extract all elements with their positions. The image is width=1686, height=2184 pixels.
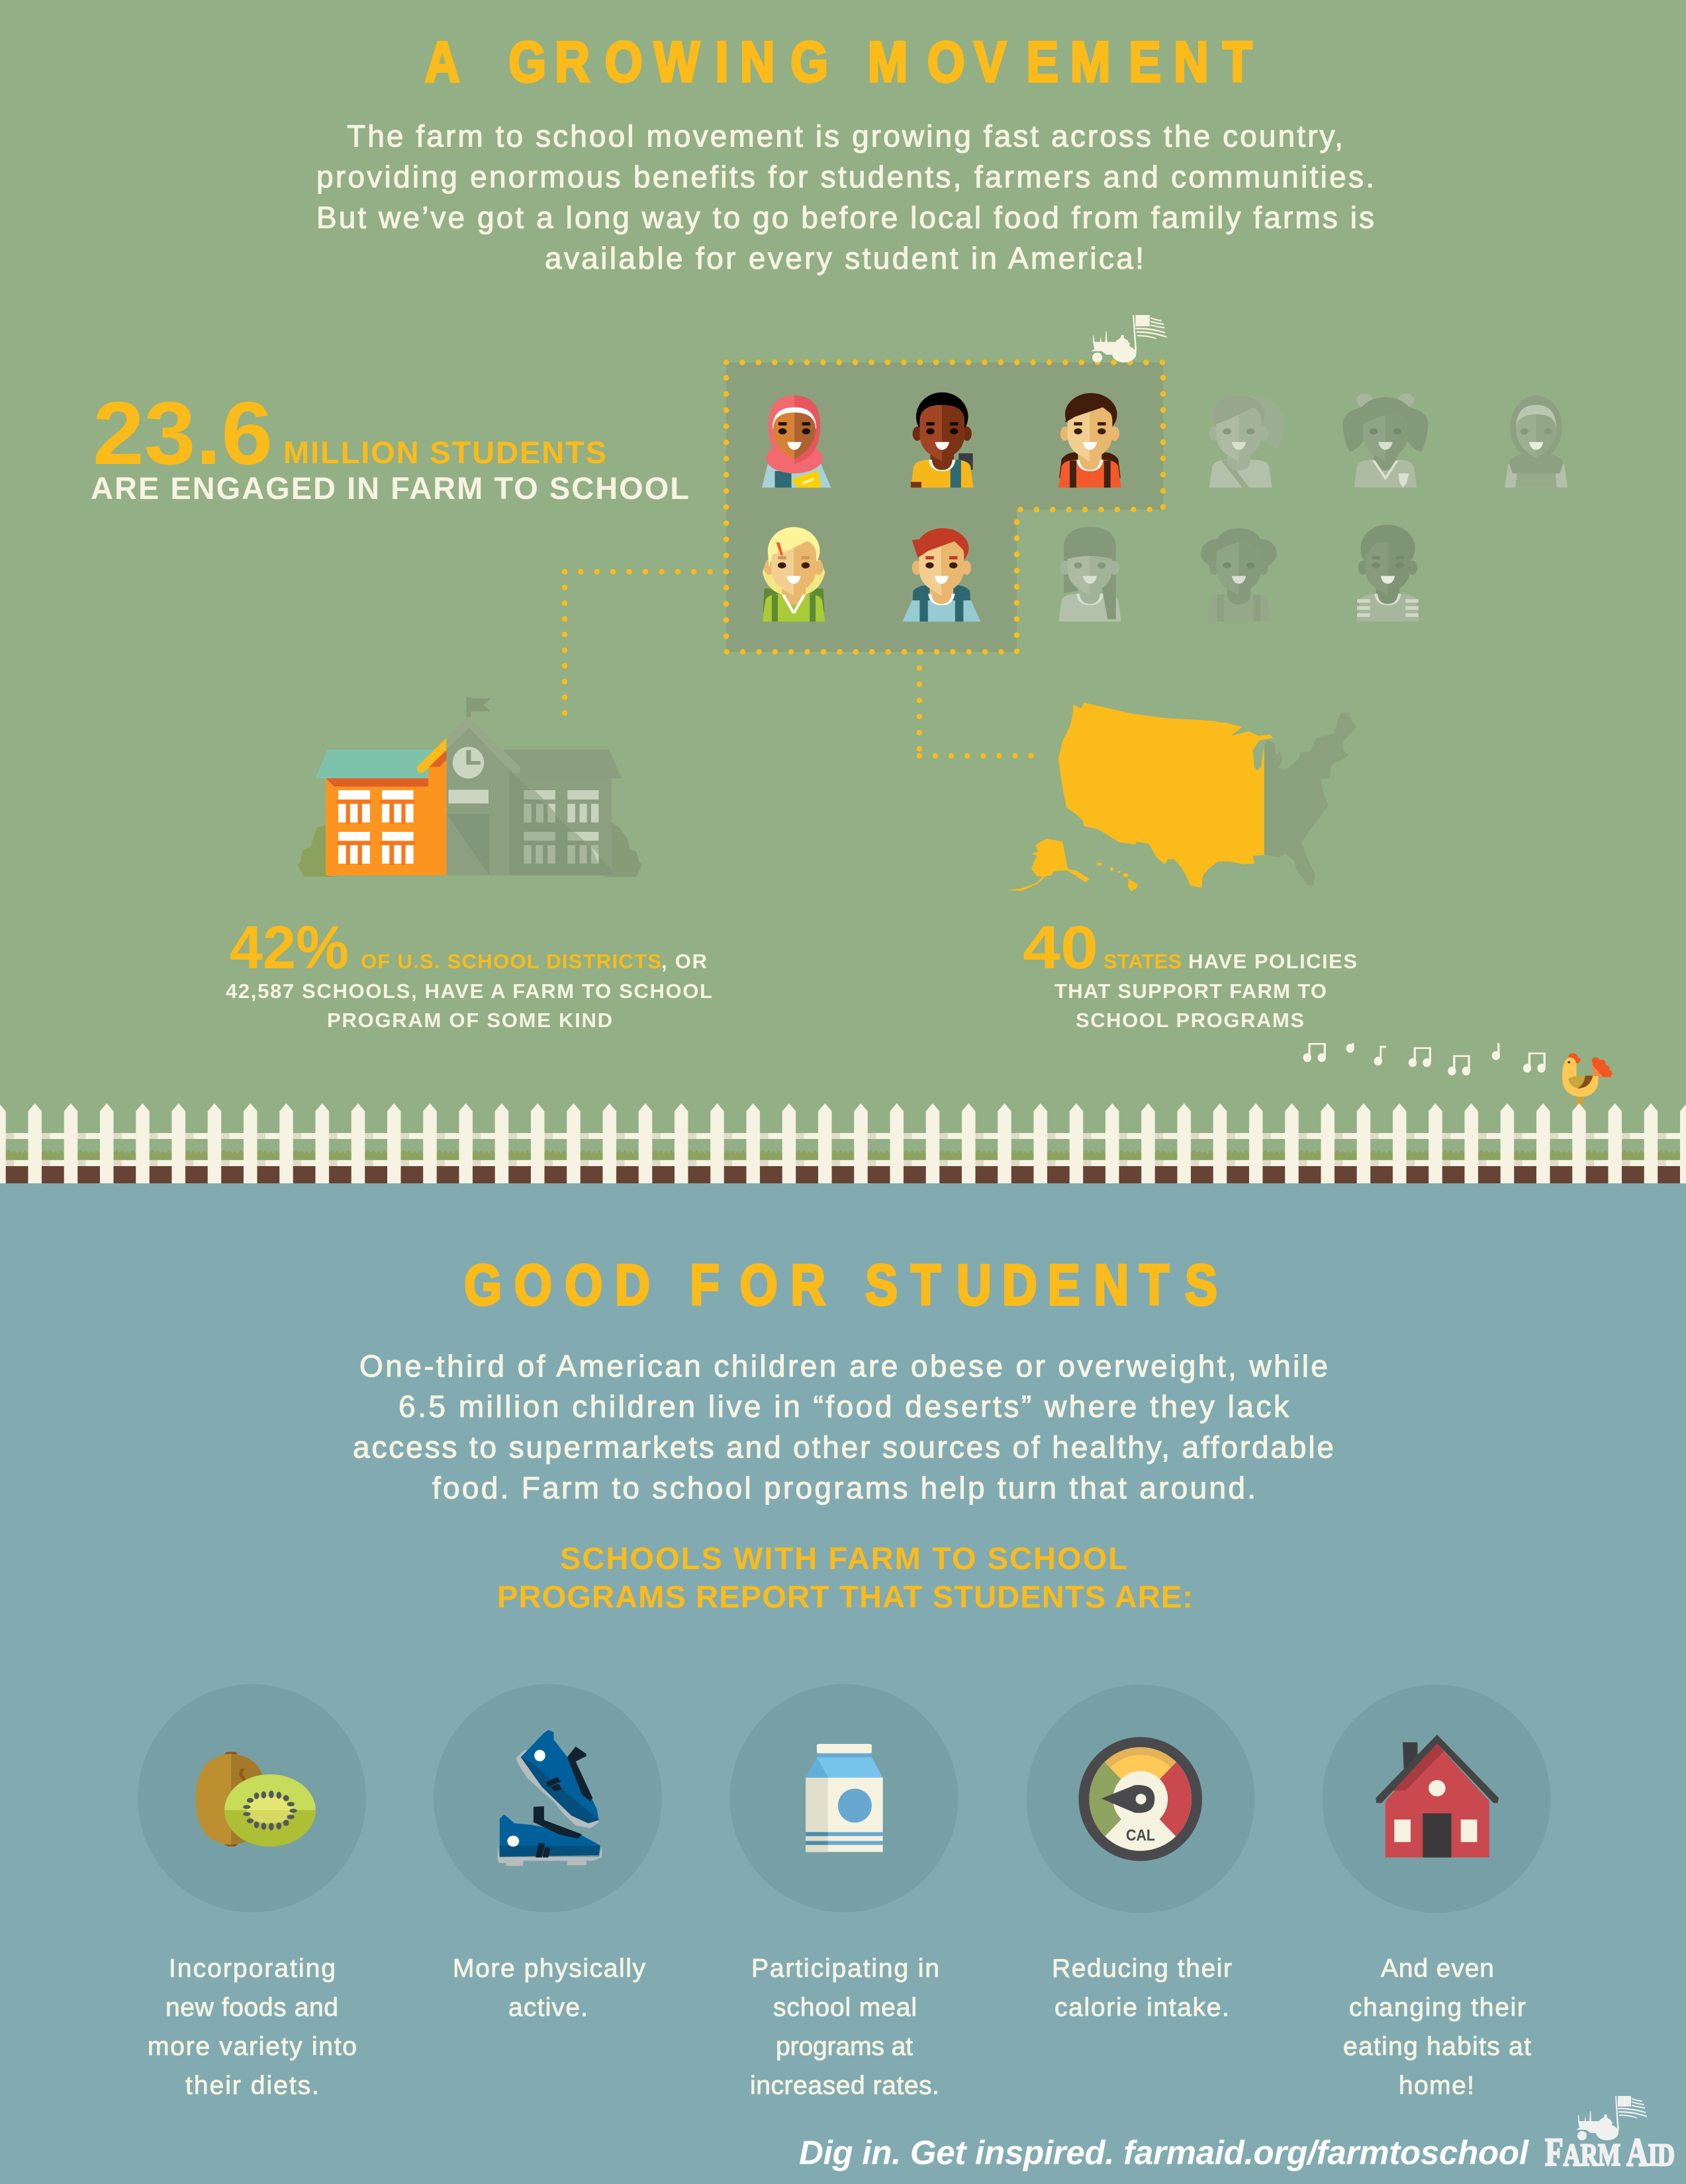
student: faded girl in hijab xyxy=(1505,395,1568,488)
logo wordmark: FARM AID xyxy=(1545,2130,1675,2174)
icon: school building half coloured xyxy=(297,697,642,877)
intro paragraph: The farm to school movement is growing fast across the country, xyxy=(347,119,1343,154)
school left coloured half xyxy=(316,738,446,876)
icon: red house xyxy=(1376,1735,1499,1858)
student portraits grid xyxy=(762,392,1568,621)
icon: running shoes xyxy=(498,1730,602,1866)
rooster xyxy=(1562,1053,1613,1105)
caption: eating habits: home! xyxy=(1399,2071,1474,2100)
icon: calorie gauge: CAL xyxy=(1126,1827,1155,1844)
picket fence with grass and soil xyxy=(0,1103,1686,1183)
caption: school meals: increased rates. xyxy=(750,2071,939,2100)
caption: eating habits xyxy=(1343,1954,1531,2100)
hawaii xyxy=(1098,862,1138,891)
stat: 40 states have policies xyxy=(1023,914,1357,1032)
school right gray half xyxy=(446,697,622,876)
dotted connector to map xyxy=(919,652,1032,756)
caption: new foods: their diets. xyxy=(185,2071,319,2100)
students paragraph: access to supermarkets and other sources of healthy, affordable xyxy=(353,1430,1334,1464)
caption: eating habits: changing their xyxy=(1349,1993,1526,2022)
student: boy with brown hair xyxy=(1058,393,1121,488)
students paragraph xyxy=(353,1349,1334,1505)
stat: 42 percent of school districts: , OR xyxy=(661,950,707,973)
caption: calorie intake xyxy=(1052,1954,1232,2022)
caption: school meals xyxy=(750,1954,939,2100)
student: faded girl with long hair xyxy=(1058,527,1121,621)
icon: milk carton xyxy=(806,1744,883,1852)
icon: kiwi xyxy=(196,1752,316,1846)
intro paragraph xyxy=(316,119,1374,275)
bushes xyxy=(297,823,642,877)
stat: 23.6 million students: 23.6 xyxy=(93,383,273,483)
music notes xyxy=(1303,1043,1546,1075)
bottom shoe xyxy=(498,1806,602,1866)
intro paragraph: providing enormous benefits for students, farmers and communities. xyxy=(316,159,1374,194)
music notes and rooster xyxy=(1303,1043,1613,1105)
stat: 42 percent of school districts: PROGRAM OF SOME KIND xyxy=(327,1009,612,1032)
icon: calorie gauge xyxy=(1079,1737,1202,1861)
highlighted student frame xyxy=(726,363,1163,652)
circle backgrounds for benefit icons xyxy=(138,1684,1550,1913)
stat: 23.6 million students: ARE ENGAGED IN FARM TO SCHOOL xyxy=(91,471,689,506)
student: faded girl with pigtails xyxy=(1342,394,1428,488)
stat: 40 states have policies: 40 xyxy=(1023,914,1098,981)
panel: green section background xyxy=(0,0,1686,1183)
caption: school meals: programs at xyxy=(776,2032,913,2061)
stat: 40 states have policies: HAVE POLICIES xyxy=(1188,950,1357,973)
student: girl in pink hijab xyxy=(762,395,831,488)
top shoe xyxy=(516,1730,599,1829)
stat: 23.6 million students xyxy=(91,383,689,506)
caption: physically active: More physically xyxy=(453,1954,646,1983)
title: good for students: GOOD FOR STUDENTS xyxy=(464,1253,1217,1316)
stat: 42 percent of school districts xyxy=(226,914,712,1032)
icon: tractor and flag xyxy=(1576,2096,1647,2140)
footer call to action: Dig in. Get inspired. farmaid.org/farmtoschool xyxy=(799,2134,1530,2171)
caption: eating habits: eating habits at xyxy=(1343,2032,1531,2061)
stat: 42 percent of school districts: OF U.S. SCHOOL DISTRICTS xyxy=(361,950,661,973)
farm aid logo xyxy=(1545,2096,1675,2174)
stat: 40 states have policies: THAT SUPPORT FARM TO xyxy=(1054,979,1327,1003)
caption: calorie intake: calorie intake. xyxy=(1054,1993,1229,2022)
student: boy with red hair xyxy=(902,528,980,621)
students paragraph: food. Farm to school programs help turn that around. xyxy=(432,1471,1256,1505)
stat: 23.6 million students: MILLION STUDENTS xyxy=(283,435,606,470)
caption: physically active xyxy=(453,1954,646,2022)
alaska xyxy=(1006,839,1090,891)
caption: eating habits: And even xyxy=(1381,1954,1494,1983)
student: blonde girl xyxy=(763,527,825,621)
caption: school meals: school meal xyxy=(773,1993,917,2022)
subheading: schools report: SCHOOLS WITH FARM TO SCHOOL xyxy=(560,1541,1127,1576)
subheading: schools report: PROGRAMS REPORT THAT STUDENTS ARE: xyxy=(497,1579,1193,1614)
caption: new foods: more variety into xyxy=(148,2032,357,2061)
stat: 40 states have policies: STATES xyxy=(1103,950,1182,973)
panel: blue section background xyxy=(0,1183,1686,2184)
student: faded boy in striped shirt xyxy=(1356,525,1419,621)
stat: 42 percent of school districts: 42,587 SCHOOLS, HAVE A FARM TO SCHOOL xyxy=(226,979,712,1003)
title: a growing movement: A GROWING MOVEMENT xyxy=(425,30,1252,93)
students paragraph: 6.5 million children live in “food deserts” where they lack xyxy=(398,1389,1289,1424)
stat: 42 percent of school districts: 42% xyxy=(230,914,349,981)
student: boy in yellow shirt xyxy=(911,392,974,488)
caption: new foods xyxy=(148,1954,357,2100)
icon: tractor and flag logo above frame xyxy=(1091,315,1166,363)
students paragraph: One-third of American children are obese or overweight, while xyxy=(359,1349,1328,1383)
caption: new foods: new foods and xyxy=(165,1993,338,2022)
dotted connector to school xyxy=(565,572,726,714)
map west yellow xyxy=(1058,703,1273,888)
intro paragraph: available for every student in America! xyxy=(545,241,1144,275)
student: faded girl with ponytail xyxy=(1209,395,1283,488)
caption: new foods: Incorporating xyxy=(169,1954,336,1983)
intro paragraph: But we’ve got a long way to go before local food from family farms is xyxy=(316,200,1374,234)
stat: 40 states have policies: SCHOOL PROGRAMS xyxy=(1076,1009,1304,1032)
caption: physically active: active. xyxy=(508,1993,588,2022)
caption: calorie intake: Reducing their xyxy=(1052,1954,1232,1983)
subheading: schools report xyxy=(497,1541,1193,1614)
student: faded boy with wavy hair xyxy=(1201,528,1277,621)
icon: map of the united states xyxy=(1006,703,1357,891)
caption: school meals: Participating in xyxy=(751,1954,939,1983)
map east gray xyxy=(1264,713,1357,886)
